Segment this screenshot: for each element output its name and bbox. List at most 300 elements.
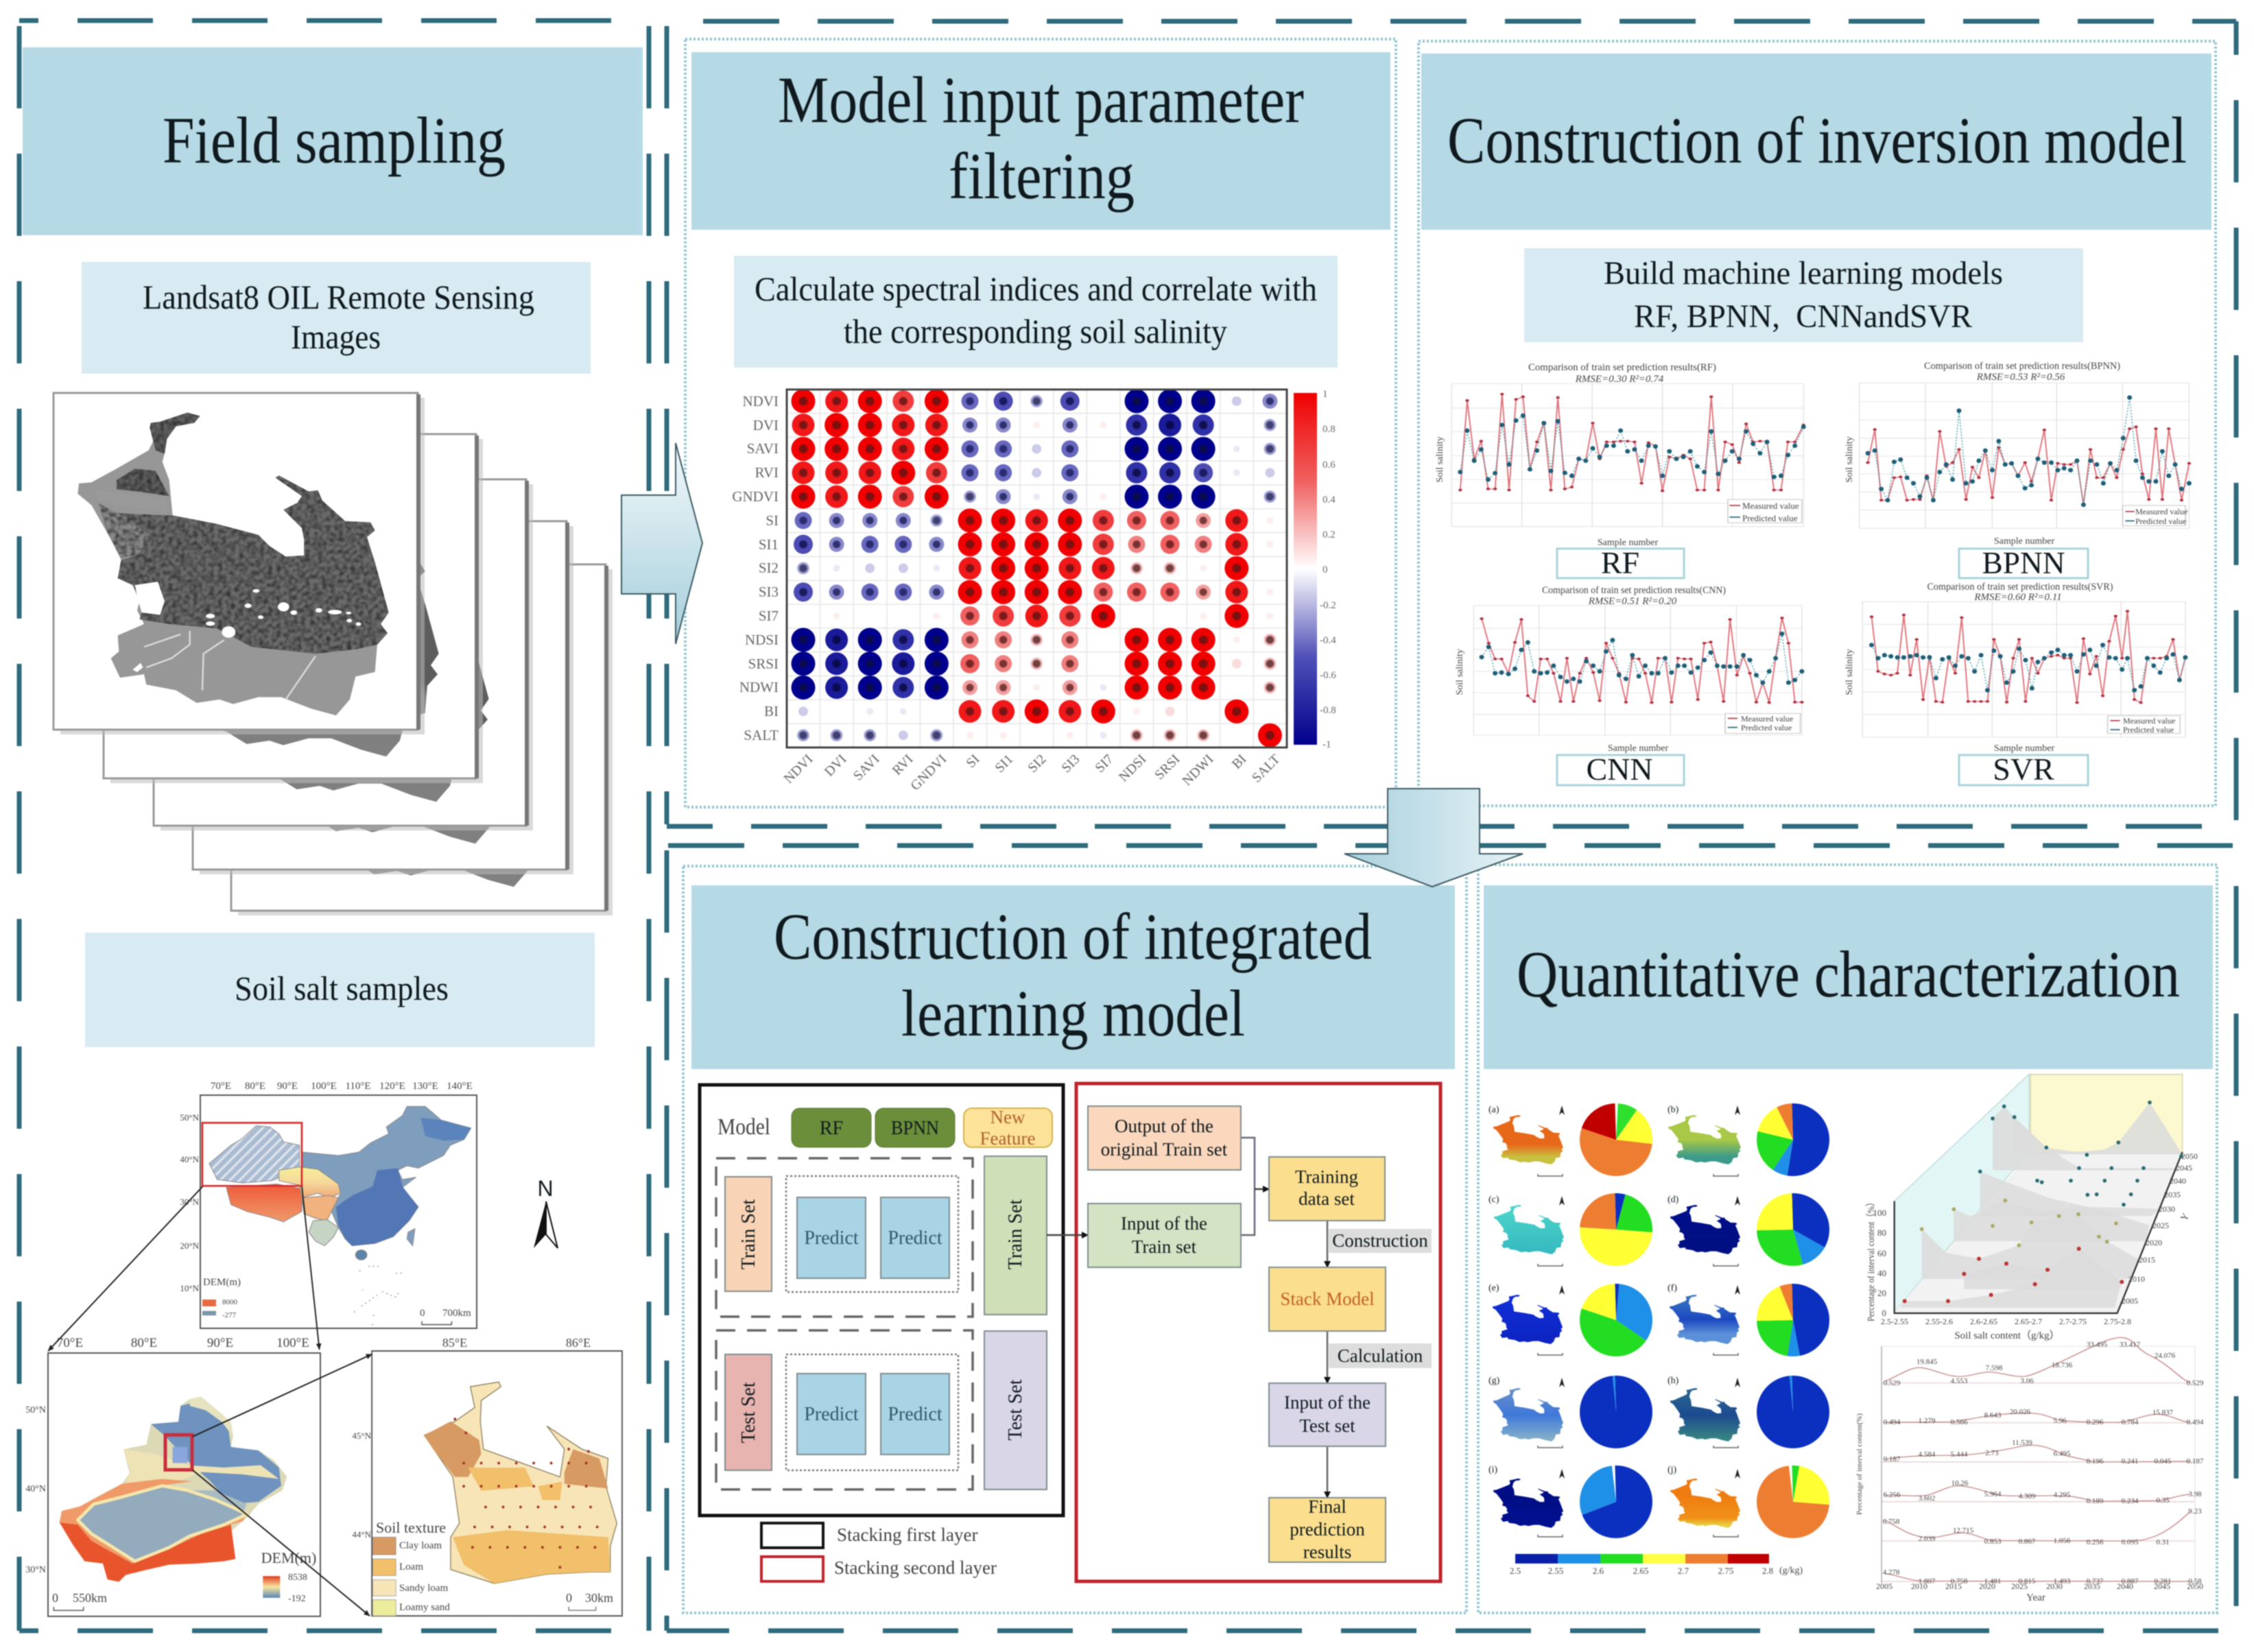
map: soil texture of study area: 45°N [352,1430,372,1441]
chart: interval content over time: 0.241 [2122,1457,2138,1465]
label: CNN: CNN [1586,752,1653,787]
chart: 3D interval content: 2.75-2.8 [2104,1317,2131,1326]
chart: SVR prediction: Measured value [2123,716,2175,726]
chart: 3D interval content: 2030 [2159,1204,2175,1214]
map: soil texture of study area [352,1336,622,1616]
chart: correlation matrix: SAVI [747,440,779,457]
chart: interval content over time: 3.06 [2020,1377,2034,1385]
chart: 3D interval content: 2025 [2152,1221,2169,1230]
chart: interval content over time: 4.278 [1883,1568,1900,1577]
chart: correlation matrix: NDVI [781,752,816,787]
diagram: stacking second layer: Input of the [1284,1392,1371,1413]
chart: interval content over time: 0.784 [2122,1418,2139,1426]
map: Xinjiang DEM: 80°E [131,1336,157,1350]
panel: field sampling [23,47,643,1616]
chart: BPNN prediction: Soil salinity [1844,436,1855,483]
subheading: Landsat8 images: Images [291,318,381,356]
chart: interval content over time: 4.309 [2019,1492,2036,1500]
chart: RF prediction: RMSE=0.30 R²=0.74 [1575,374,1664,385]
heading: integrated model [691,885,1455,1069]
chart: interval content over time: 0.494 [2187,1418,2204,1426]
legend: colour bar [1294,389,1336,750]
map: China overview: 700km [442,1308,471,1319]
legend: colour bar: -1 [1322,739,1331,750]
maps: salinity by period: (e) [1488,1283,1499,1293]
chart: interval content over time: 4.295 [2054,1491,2071,1499]
chart: correlation matrix: RVI [890,752,916,778]
chart: correlation matrix: NDSI [745,632,779,648]
diagram: stacking second layer: prediction [1290,1519,1365,1540]
label: RF: RF [1601,545,1639,580]
chart: interval content over time: 33.417 [2120,1341,2141,1349]
subheading: soil salt samples: Soil salt samples [235,969,449,1007]
chart: interval content over time: 15.837 [2152,1409,2174,1417]
chart: 3D interval content: 0 [1882,1308,1886,1318]
chart: BPNN prediction: Comparison of train set prediction results(BPNN) [1924,361,2120,372]
label: BPNN: BPNN [1982,545,2065,580]
legend: stacking layers: Stacking second layer [834,1557,997,1578]
heading: field sampling [23,47,643,235]
chart: interval content over time: 4.584 [1919,1450,1936,1459]
map: Xinjiang DEM: 30°N [25,1565,46,1575]
chart: interval content over time: 10.26 [1952,1479,1969,1487]
map: Xinjiang DEM: 8538 [288,1572,307,1583]
label: RF [1557,545,1684,580]
map: Xinjiang DEM: 50°N [25,1405,46,1415]
chart: 3D interval content: Soil salt content（g/kg） [1954,1330,2060,1341]
map: China overview: 110°E [345,1081,371,1092]
chart: interval content over time: 6.256 [1884,1491,1901,1499]
chart: CNN prediction: RMSE=0.51 R²=0.20 [1588,596,1677,607]
chart: correlation matrix: SI2 [1025,752,1049,776]
map: China overview: 100°E [311,1081,337,1092]
chart: correlation matrix: SRSI [748,656,779,672]
chart: interval content over time: 5.96 [2053,1417,2067,1425]
map: soil texture of study area: 0 [566,1591,572,1605]
chart: BPNN prediction: Predicted value [2135,516,2186,526]
chart: interval content over time: 0.529 [2187,1379,2204,1387]
maps: salinity by period: (b) [1668,1105,1679,1115]
map: soil texture of study area: Sandy loam [399,1583,449,1594]
chart: CNN prediction: Predicted value [1741,723,1792,732]
chart: correlation matrix: SI1 [992,752,1017,776]
chart: interval content over time: 0.853 [1984,1537,2002,1546]
chart: correlation matrix: SI3 [1058,752,1083,776]
map: soil texture of study area: Loamy sand [399,1602,450,1613]
chart: interval content over time: 0.045 [2155,1457,2172,1465]
chart: SVR prediction: RMSE=0.60 R²=0.11 [1973,592,2062,603]
chart: correlation matrix: SI1 [759,536,779,553]
chart: correlation matrix: SI2 [759,560,779,576]
diagram: stacking first layer: RF [820,1118,843,1139]
chart: correlation matrix: SI3 [759,584,779,600]
legend: salinity scale: 2.65 [1633,1566,1648,1576]
diagram: stacking first layer: Predict [804,1404,859,1425]
chart: 3D interval content: 100 [1873,1208,1886,1218]
chart: CNN prediction: Measured value [1741,714,1793,723]
diagram: stacking first layer: Predict [888,1228,942,1249]
panel: quantitative characterization [1484,885,2213,1603]
subheading: spectral indices: Calculate spectral indices and correlate with [755,270,1317,308]
map: China overview: 80°E [245,1081,265,1092]
chart: 3D interval content: 2045 [2176,1163,2192,1173]
legend: colour bar: -0.8 [1320,705,1336,716]
chart: interval content over time: 0.566 [1951,1418,1968,1426]
diagram: stacking first layer: Predict [888,1404,942,1425]
map: soil texture of study area: Soil texture [376,1519,446,1536]
map: Xinjiang DEM: 550km [73,1591,107,1605]
diagram: stacking second layer: Input of the [1121,1213,1207,1234]
chart: interval content over time: 0.095 [2122,1538,2139,1546]
maps: salinity by period: (g) [1488,1376,1500,1386]
chart: interval content over time: 0.35 [2156,1496,2170,1505]
chart: correlation matrix: SAVI [851,752,883,784]
map: China overview: 0 [420,1308,425,1319]
diagram: stacking first layer: Model [717,1114,770,1140]
icon: north arrow: N [537,1176,554,1201]
chart: SVR prediction [1844,582,2185,754]
chart: interval content over time: 2020 [1979,1581,1995,1591]
panel: model input parameter filtering [691,52,1390,793]
chart: interval content over time: 9.23 [2188,1507,2202,1516]
chart: correlation matrix: RVI [755,464,779,481]
map: Xinjiang DEM: 40°N [25,1484,46,1494]
chart: interval content over time: 24.076 [2155,1352,2176,1360]
chart: interval content over time: 3.602 [1919,1494,1935,1503]
map: China overview: 130°E [412,1081,438,1092]
heading: model input: filtering [949,139,1135,213]
chart: interval content over time: 0.758 [1951,1577,1968,1585]
chart: interval content over time: 4.553 [1951,1377,1968,1385]
diagram: stacking second layer [1047,1084,1440,1581]
maps: salinity by period: (f) [1668,1283,1677,1293]
heading: quantitative characterization [1484,885,2213,1069]
chart: 3D interval content: 2.65-2.7 [2015,1317,2042,1326]
chart: RF prediction: Measured value [1742,501,1799,511]
maps: salinity by period: (i) [1488,1465,1498,1475]
chart: 3D interval content: 2005 [2122,1296,2138,1306]
chart: interval content over time: 12.715 [1953,1527,1974,1535]
legend: colour bar: -0.6 [1320,670,1336,681]
maps: salinity by period [1488,1105,1741,1537]
diagram: stacking first layer: New [990,1107,1025,1127]
chart: interval content over time: 2050 [2187,1581,2203,1591]
map: soil texture of study area: Loam [399,1561,423,1572]
map: China overview: 70°E [211,1081,231,1092]
heading: integrated model: learning model [901,977,1245,1050]
chart: interval content over time: 0.281 [2155,1577,2171,1585]
legend: salinity scale: 2.7 [1678,1566,1689,1576]
legend: salinity scale [1510,1554,1803,1576]
chart: interval content over time: 11.539 [2012,1439,2032,1447]
chart: correlation matrix: NDWI [1179,752,1217,789]
chart: interval content over time: 5.964 [1984,1490,2002,1498]
chart: 3D interval content: 20 [1877,1288,1886,1298]
legend: salinity scale: 2.8 [1762,1566,1773,1576]
subheading: Landsat8 images: Landsat8 OIL Remote Sensing [143,278,534,316]
chart: 3D interval content: 2.6-2.65 [1970,1317,1997,1326]
chart: interval content over time: 2030 [2046,1581,2063,1591]
chart: interval content over time: 6.758 [1883,1518,1900,1526]
map: Xinjiang DEM: -192 [288,1594,306,1604]
chart: interval content over time: 2005 [1876,1581,1893,1591]
chart: RF prediction: Predicted value [1742,513,1798,523]
chart: correlation matrix: NDSI [1116,752,1150,785]
chart: interval content over time: Year [2026,1592,2045,1603]
maps: salinity by period: (c) [1488,1195,1499,1205]
diagram: stacking second layer: original Train set [1101,1139,1228,1160]
diagram: stacking first layer: Test Set [738,1382,759,1444]
chart: CNN prediction [1455,585,1802,754]
chart: 3D interval content: 2.7-2.75 [2059,1317,2087,1326]
map: China overview: 40°N [180,1154,200,1164]
chart: SVR prediction: Predicted value [2123,725,2174,734]
chart: interval content over time: 3.98 [2188,1490,2202,1498]
heading: integrated model: Construction of integrated [774,900,1372,973]
legend: colour bar: 0.8 [1322,424,1336,435]
chart: interval content over time: 2010 [1911,1581,1927,1591]
chart: interval content over time: 0.815 [2019,1577,2036,1585]
chart: 3D interval content: Y [2179,1212,2192,1223]
subheading: machine learning models: Build machine learning models [1604,255,2003,291]
diagram: stacking second layer: Stack Model [1280,1289,1375,1309]
legend: colour bar: -0.4 [1320,635,1336,646]
map: soil texture of study area: 30km [585,1591,613,1605]
chart: interval content over time: 0.58 [2188,1577,2202,1585]
legend: salinity scale: 2.75 [1718,1566,1733,1576]
chart: RF prediction [1435,362,1803,548]
chart: interval content over time: 2025 [2011,1581,2028,1591]
chart: 3D interval content: 60 [1877,1248,1886,1258]
chart: interval content over time: 0.256 [2087,1538,2104,1546]
zoom arrows between maps [48,1186,372,1616]
diagram: stacking second layer: results [1303,1542,1351,1562]
chart: interval content over time: 1.493 [2054,1577,2071,1585]
chart: interval content over time: 1.056 [2054,1537,2071,1545]
diagram: stacking second layer: Training [1295,1166,1358,1187]
legend: stacking layers: Stacking first layer [837,1524,977,1545]
panel: construction of integrated learning model [691,885,1455,1581]
chart: interval content over time: 2035 [2084,1581,2100,1591]
chart: interval content over time: 2.73 [1985,1449,1999,1457]
chart: interval content over time: 1.807 [1919,1577,1936,1585]
heading: model input [691,52,1390,230]
chart: correlation matrix: GNDVI [907,752,950,793]
map: China overview: 20°N [180,1241,200,1251]
legend: colour bar: -0.2 [1320,600,1336,611]
map: soil texture of study area: 86°E [566,1336,591,1350]
maps: salinity by period: (a) [1488,1105,1499,1115]
chart: correlation matrix: SI [963,752,983,771]
chart: interval content over time: 19.845 [1917,1358,1938,1366]
legend: colour bar: 0.6 [1322,459,1336,470]
chart: correlation matrix: SI [766,512,779,529]
chart: correlation matrix [732,389,1336,793]
chart: correlation matrix: BI [764,703,779,719]
legend: salinity scale: 2.55 [1548,1566,1563,1576]
chart: interval content over time: Percentage of interval content(%) [1855,1413,1864,1515]
map: Xinjiang DEM: DEM(m) [261,1549,316,1566]
heading: field sampling: Field sampling [163,104,506,177]
diagram: stacking first layer [700,1085,1063,1516]
pie charts: salinity class share [1598,1122,1811,1520]
chart: interval content over time: 6.495 [2054,1450,2071,1458]
chart: correlation matrix: NDVI [742,393,779,409]
chart: SVR prediction: Comparison of train set prediction results(SVR) [1927,582,2113,592]
chart: interval content over time: 0.867 [2019,1537,2036,1546]
diagram: stacking second layer: data set [1298,1188,1355,1209]
map: China overview: 8000 [222,1298,237,1306]
legend: colour bar: 1 [1322,389,1328,400]
chart: interval content over time: 0.187 [1884,1455,1901,1463]
chart: 3D interval content: 40 [1877,1268,1886,1278]
legend: salinity scale: (g/kg) [1779,1566,1803,1576]
chart: interval content over time: 0.737 [2087,1577,2104,1585]
label: BPNN [1959,545,2088,580]
chart: 3D interval content: 2010 [2128,1274,2145,1284]
icon: north arrow [534,1176,558,1248]
chart: correlation matrix: SI7 [759,608,779,624]
subheading: machine learning models: RF, BPNN, CNNandSVR [1634,298,1972,335]
chart: correlation matrix: BI [1229,752,1250,772]
chart: interval content over time: 0.187 [2187,1457,2204,1465]
chart: 3D interval content: 2.55-2.6 [1925,1317,1953,1326]
chart: RF prediction: Comparison of train set prediction results(RF) [1528,362,1716,373]
map: Xinjiang DEM: 0 [52,1591,58,1605]
chart: BPNN prediction [1844,361,2189,547]
chart: BPNN prediction: Sample number [1994,536,2054,547]
chart: correlation matrix: DVI [753,417,779,433]
chart: interval content over time: 2015 [1945,1581,1962,1591]
chart: 3D interval content: 2035 [2164,1190,2181,1199]
chart: interval content over time: 8.643 [1984,1411,2002,1420]
chart: BPNN prediction: Measured value [2135,507,2187,516]
chart: interval content over time: 0.196 [2087,1457,2104,1465]
chart: interval content over time: 0.189 [2087,1497,2104,1505]
map: Xinjiang DEM: 90°E [207,1336,233,1350]
chart: interval content over time: 2040 [2117,1581,2133,1591]
diagram: stacking second layer: Calculation [1338,1345,1423,1366]
chart: interval content over time: 1.279 [1919,1417,1936,1425]
heading: model input: Model input parameter [778,63,1304,136]
chart: 3D interval content [1866,1074,2198,1341]
chart: interval content over time [1855,1337,2204,1603]
chart: interval content over time: 0.887 [2122,1577,2139,1585]
diagram: stacking first layer: Train Set [738,1199,759,1269]
map: China overview: 120°E [379,1081,405,1092]
legend: colour bar: 0 [1322,564,1328,575]
chart: SVR prediction: Soil salinity [1844,649,1855,695]
chart: interval content over time: 0.296 [2087,1418,2104,1426]
chart: interval content over time: 5.444 [1951,1450,1968,1459]
subheading: machine learning models [1524,248,2083,342]
label: SVR: SVR [1993,752,2054,787]
chart: CNN prediction: Soil salinity [1455,649,1465,695]
chart: RF prediction: Soil salinity [1435,436,1445,483]
chart: 3D interval content: 2040 [2170,1176,2186,1186]
chart: interval content over time: 18.736 [2052,1361,2073,1369]
diagram: stacking first layer: BPNN [891,1118,939,1139]
chart: correlation matrix: SALT [1249,752,1283,786]
map: China overview: 10°N [180,1283,200,1293]
subheading: spectral indices: the corresponding soil salinity [844,312,1227,350]
chart: CNN prediction: Sample number [1608,743,1668,754]
diagram: stacking second layer: Test set [1299,1415,1355,1436]
chart: RF prediction: Sample number [1598,538,1658,548]
chart: 3D interval content: 2050 [2181,1151,2198,1161]
inner dotted frames [683,39,2217,1613]
chart: correlation matrix: SRSI [1152,752,1183,782]
chart: CNN prediction: Comparison of train set prediction results(CNN) [1542,585,1726,596]
legend: salinity scale: 2.6 [1593,1566,1604,1576]
map: soil texture of study area: 44°N [352,1529,372,1540]
map: China overview: 140°E [447,1081,473,1092]
arrow: down to integrated model [1344,789,1523,887]
chart: 3D interval content: Percentage of interval content（%） [1866,1198,1877,1321]
image stack: remote sensing scenes [54,393,613,915]
legend: stacking layers [761,1523,997,1581]
subheading: soil salt samples [85,933,595,1047]
maps: salinity by period: (h) [1668,1376,1679,1386]
label: CNN [1557,752,1684,787]
maps: salinity by period: (j) [1668,1465,1677,1475]
chart: 3D interval content: 2.5-2.55 [1881,1317,1908,1326]
arrow: to input filtering [621,443,702,644]
chart: 3D interval content: 2020 [2146,1238,2162,1247]
map: soil texture of study area: Clay loam [399,1540,442,1551]
chart: correlation matrix: GNDVI [732,488,779,505]
chart: interval content over time: 33.495 [2087,1341,2108,1349]
chart: SVR prediction: Sample number [1994,743,2054,754]
maps: salinity by period: (d) [1668,1195,1679,1205]
map: Xinjiang DEM [25,1336,320,1616]
map: China overview: 90°E [277,1081,298,1092]
chart: interval content over time: 20.026 [2010,1408,2031,1416]
chart: correlation matrix: DVI [822,752,850,780]
diagram: stacking first layer: Test Set [1005,1379,1026,1441]
chart: correlation matrix: SI7 [1092,752,1117,776]
legend: salinity scale: 2.5 [1510,1566,1521,1576]
chart: interval content over time: 2045 [2154,1581,2170,1591]
map: Xinjiang DEM: 70°E [57,1336,83,1350]
map: soil texture of study area: 85°E [442,1336,467,1350]
diagram: stacking second layer: Train set [1132,1236,1197,1257]
panel: construction of inversion model [1421,53,2211,787]
diagram: stacking second layer: Output of the [1115,1116,1213,1136]
chart: correlation matrix: SALT [744,727,779,743]
diagram: stacking first layer: Predict [804,1228,859,1249]
chart: interval content over time: 0.31 [2156,1538,2170,1546]
chart: interval content over time: 2.039 [1919,1535,1936,1543]
legend: colour bar: 0.4 [1322,494,1336,505]
map: Xinjiang DEM: 100°E [276,1336,309,1350]
label: SVR [1959,752,2088,787]
map: China overview: -277 [222,1311,237,1319]
map: China overview [180,1081,477,1328]
diagram: stacking second layer: Final [1308,1496,1347,1517]
map: China overview: DEM(m) [203,1277,241,1288]
chart: interval content over time: 0.494 [1884,1418,1901,1426]
diagram: stacking first layer: Train Set [1005,1199,1026,1269]
diagram: stacking second layer: Construction [1332,1230,1428,1251]
chart: interval content over time: 0.529 [1884,1379,1901,1387]
chart: 3D interval content: 2015 [2139,1255,2155,1265]
heading: inversion model [1421,53,2211,230]
chart: correlation matrix: NDWI [739,679,779,695]
chart: interval content over time: 1.481 [1984,1577,2001,1585]
map: China overview: 50°N [180,1112,200,1123]
diagram: stacking first layer: Feature [980,1128,1035,1149]
